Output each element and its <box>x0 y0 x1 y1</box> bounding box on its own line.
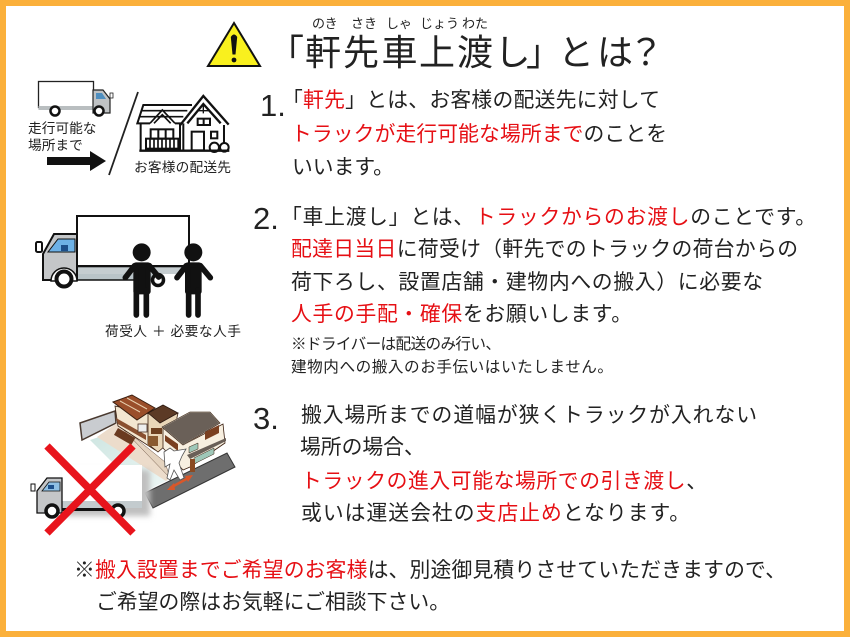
truck shadow <box>66 470 150 516</box>
title with ruby: さき <box>351 16 377 31</box>
title with ruby: じょう <box>420 16 459 31</box>
icon: house <box>137 96 229 152</box>
footer note: ご希望の際はお気軽にご相談下さい。 <box>96 591 450 614</box>
text block 1: いいます。 <box>292 156 394 179</box>
wall <box>80 411 116 440</box>
title with ruby: のき <box>312 16 338 31</box>
label: delivery destination: お客様の配送先 <box>134 159 231 175</box>
icon: small truck <box>38 82 113 116</box>
beige ground <box>97 423 170 481</box>
title with ruby: 「軒先車上渡し」とは？ <box>268 32 664 73</box>
number 2: 2. <box>253 201 279 236</box>
number 3: 3. <box>253 401 279 436</box>
text block 2: 「車上渡し」とは、トラックからのお渡しのことです。 <box>281 206 816 229</box>
footer note <box>74 559 786 614</box>
icon: large truck with two people <box>36 216 210 315</box>
truck <box>62 465 142 508</box>
house 2 <box>148 413 178 452</box>
person: left <box>125 243 159 315</box>
width arrow <box>170 477 190 488</box>
label: drivable area <box>28 121 96 153</box>
text block 2: 人手の手配・確保をお願いします。 <box>291 303 632 326</box>
title with ruby: しゃ <box>386 16 412 31</box>
footer note: ※搬入設置までご希望のお客様は、別途御見積りさせていただきますので、 <box>74 559 786 582</box>
note: driver only delivers: 建物内への搬入のお手伝いはいたしません。 <box>291 358 613 376</box>
red cross <box>47 446 133 533</box>
text block 3: トラックの進入可能な場所での引き渡し、 <box>301 470 707 493</box>
text block 3 <box>300 404 757 525</box>
road <box>145 453 235 508</box>
text block 1 <box>282 89 667 179</box>
text block 1: 「軒先」とは、お客様の配送先に対して <box>282 89 660 112</box>
text block 3: 或いは運送会社の支店止めとなります。 <box>301 502 690 525</box>
label: drivable area: 走行可能な <box>28 121 96 136</box>
arrow <box>47 151 106 171</box>
note: driver only delivers <box>291 335 613 376</box>
text block 2: 配達日当日に荷受け（軒先でのトラックの荷台からの <box>291 238 798 261</box>
house 3 <box>163 424 225 470</box>
teal ground <box>90 436 168 491</box>
text block 2: 荷下ろし、設置店舗・建物内への搬入）に必要な <box>291 271 763 294</box>
illustration: narrow road with crossed-out truck <box>31 395 235 533</box>
person: right <box>177 243 210 315</box>
note: driver only delivers: ※ドライバーは配送のみ行い、 <box>291 335 501 353</box>
house 1 <box>115 406 155 450</box>
text block 3: 搬入場所までの道幅が狭くトラックが入れない <box>301 404 757 427</box>
label: drivable area: 場所まで <box>28 138 83 153</box>
divider slash <box>109 92 138 175</box>
label: receiver plus helpers: 荷受人 ＋ 必要な人手 <box>105 324 241 339</box>
text block 2 <box>281 206 816 326</box>
icon: warning triangle <box>208 23 260 66</box>
number 1: 1. <box>260 88 286 123</box>
title with ruby: わた <box>462 16 488 31</box>
person silhouette <box>164 448 186 480</box>
text block 3: 場所の場合、 <box>300 436 425 459</box>
text block 1: トラックが走行可能な場所までのことを <box>291 123 667 146</box>
